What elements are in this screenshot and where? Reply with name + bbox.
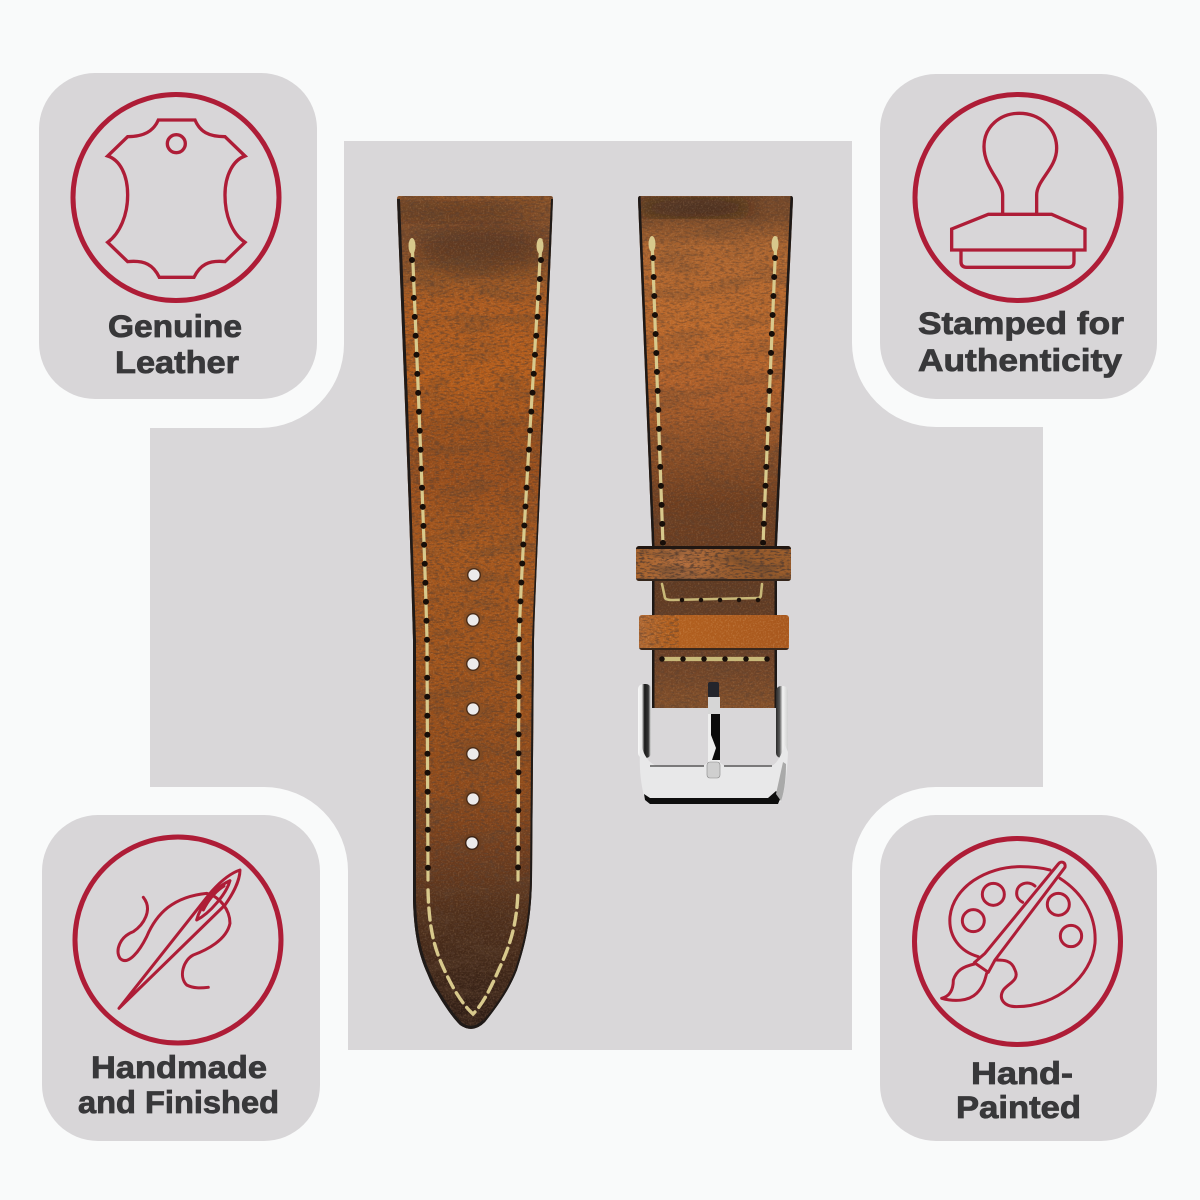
- keeper: upper loop: [636, 546, 791, 581]
- label: hand-painted: [956, 1055, 1081, 1125]
- buckle tongue: [707, 682, 720, 778]
- label: stamped for authenticity: Authenticity: [918, 342, 1123, 378]
- stitching: short strap: [648, 236, 778, 659]
- label: genuine leather: Genuine: [108, 308, 242, 344]
- label: handmade and finished: Handmade: [91, 1049, 267, 1085]
- icon: needle and thread: [75, 837, 281, 1043]
- label: stamped for authenticity: [918, 305, 1124, 378]
- panel: hand-painted: [880, 815, 1157, 1141]
- stitching: left strap: [408, 238, 544, 1014]
- short strap piece with keepers and buckle: [635, 190, 797, 804]
- label: genuine leather: Leather: [115, 344, 239, 380]
- icon: stamp: [915, 94, 1121, 300]
- label: stamped for authenticity: Stamped for: [918, 305, 1124, 341]
- strap holes: [462, 566, 484, 852]
- label: genuine leather: [108, 308, 242, 380]
- icon: palette and brush: [914, 838, 1120, 1044]
- label: hand-painted: Hand-: [971, 1055, 1073, 1091]
- label: handmade and finished: and Finished: [78, 1084, 279, 1120]
- panel: genuine leather: [39, 73, 317, 399]
- buckle: [638, 682, 788, 804]
- panel: stamped for authenticity: [880, 74, 1157, 399]
- label: hand-painted: Painted: [956, 1089, 1081, 1125]
- panel: handmade and finished: [42, 815, 320, 1141]
- long strap piece with holes: [397, 196, 553, 1029]
- keeper: lower loop: [639, 615, 789, 650]
- icon: leather hide: [73, 94, 279, 300]
- label: handmade and finished: [78, 1049, 279, 1120]
